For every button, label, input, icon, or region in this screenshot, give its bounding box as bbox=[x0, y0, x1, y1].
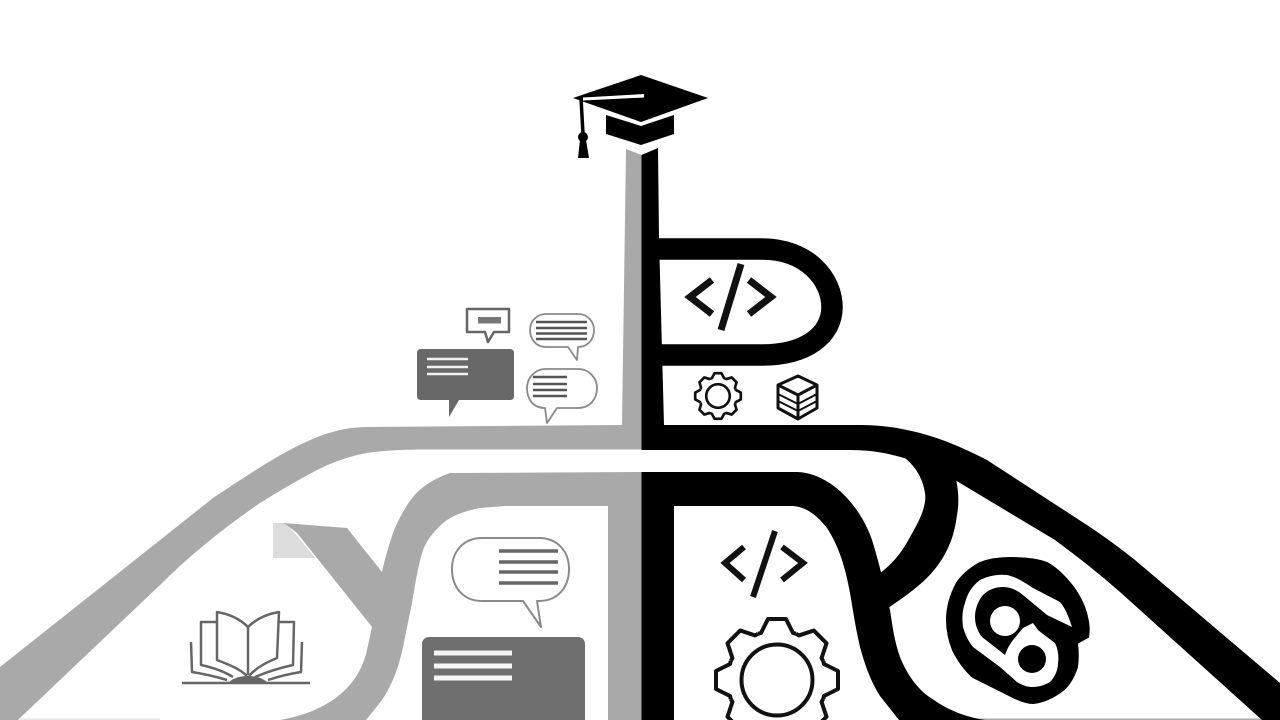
icon: lower rounded speech bubble bbox=[527, 369, 597, 423]
grey lower stem and inner road bbox=[280, 472, 642, 720]
icon: layered cube bbox=[778, 376, 817, 419]
icon: abstract linked knot bbox=[947, 558, 1089, 703]
panel: black right path network bbox=[642, 148, 1280, 720]
icon: small dark message box bbox=[417, 349, 514, 417]
icon: code brackets lower bbox=[725, 531, 803, 597]
icon: code brackets upper bbox=[690, 264, 771, 330]
icon: small square speech bubble bbox=[467, 309, 509, 342]
icon: upper rounded speech bubble bbox=[530, 314, 594, 360]
icon: open book bbox=[182, 612, 310, 683]
black connecting branch bbox=[870, 452, 958, 610]
grey folded tab bbox=[273, 523, 315, 558]
icon: large gear bbox=[716, 619, 838, 720]
icon: small gear bbox=[695, 373, 741, 419]
grey upper stem and outer road bbox=[0, 149, 642, 720]
black upper stem and outer road bbox=[642, 148, 1280, 720]
icon: graduation cap bbox=[573, 75, 708, 158]
black D-shaped loop bbox=[655, 249, 832, 355]
panel: grey left path network bbox=[0, 149, 642, 720]
icon: large outlined speech bubble bbox=[452, 538, 569, 627]
black lower stem and inner road bbox=[642, 472, 985, 720]
icon: large dark message box bbox=[422, 637, 585, 720]
